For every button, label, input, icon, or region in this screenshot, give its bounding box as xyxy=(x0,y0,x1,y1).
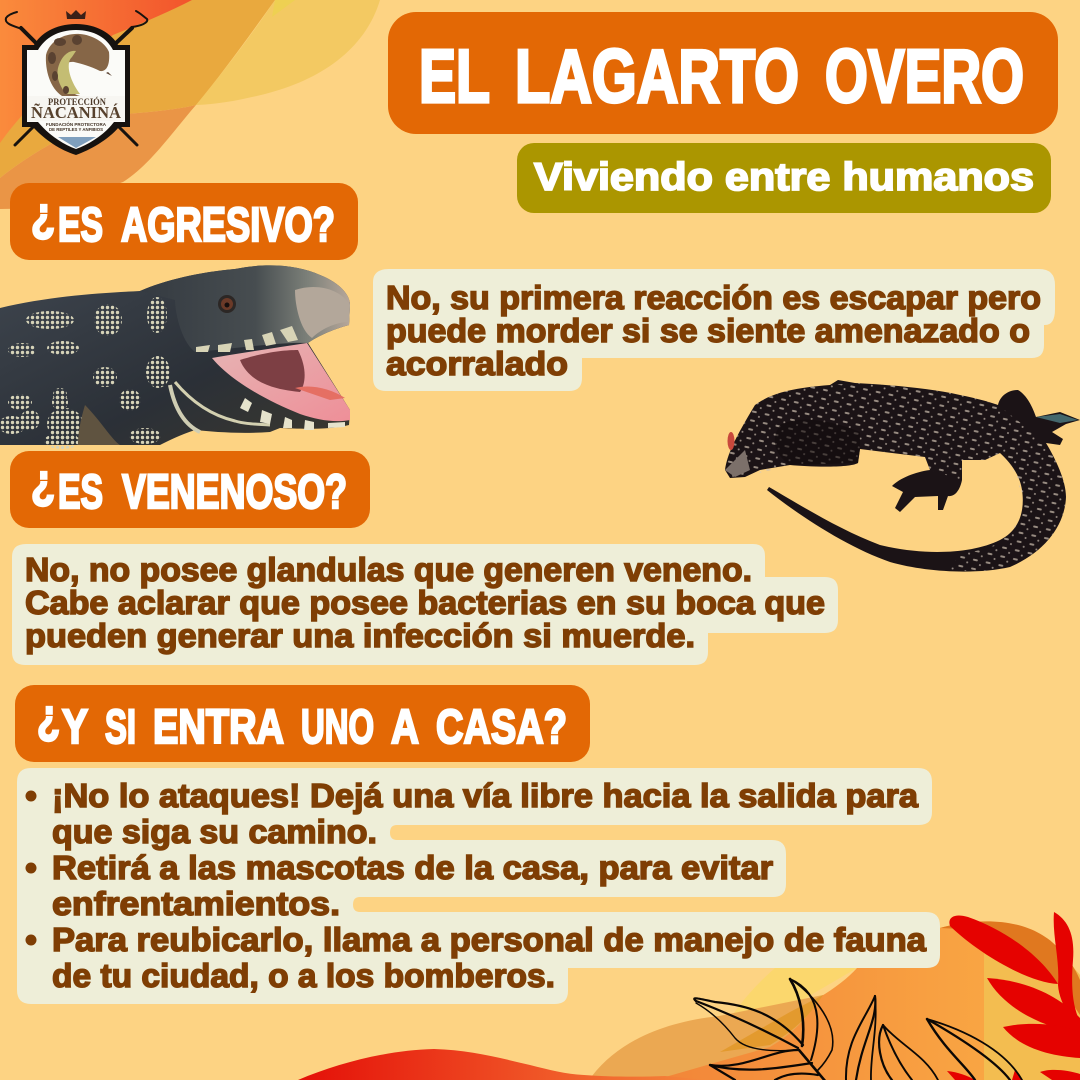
snout xyxy=(295,287,350,338)
heading: y si entra uno a casa: ENTRA xyxy=(153,701,284,754)
upper jaw stripes xyxy=(196,326,298,352)
photo: tegu lizard from above xyxy=(725,380,1080,572)
list text: ¡No lo ataques! Dejá una vía libre hacia la salida para xyxy=(52,777,919,814)
heading: es venenoso: VENENOSO? xyxy=(122,466,347,519)
heading: y si entra uno a casa: A xyxy=(391,701,419,754)
icon: snake head xyxy=(46,34,109,96)
title banner xyxy=(388,12,1058,134)
agresivo text: No, su primera reacción es escapar pero xyxy=(386,279,1041,316)
subtitle banner xyxy=(517,143,1051,213)
black outline leaves xyxy=(694,979,1022,1080)
agresivo text xyxy=(386,279,1041,382)
icon: snake markings xyxy=(48,35,112,94)
text box: list xyxy=(17,768,940,1004)
mouth xyxy=(212,343,350,421)
title text xyxy=(419,34,1024,118)
title text: LAGARTO xyxy=(515,34,799,118)
icon: snake belly xyxy=(57,51,80,94)
cream markings xyxy=(0,297,170,449)
list text: de tu ciudad, o a los bomberos. xyxy=(52,957,555,994)
bullets xyxy=(26,790,36,946)
heading: es venenoso xyxy=(10,451,370,528)
decorative corner shapes: top left xyxy=(0,0,380,209)
eye xyxy=(218,295,236,313)
decorative corner shapes: bottom xyxy=(298,921,1080,1080)
heading: y si entra uno a casa: SI xyxy=(105,701,136,754)
text box: venenoso xyxy=(12,544,838,665)
text box: agresivo xyxy=(373,269,1055,391)
logo text: fundación: FUNDACIÓN PROTECTORA xyxy=(46,122,106,127)
subtitle banner: Viviendo entre humanos xyxy=(534,156,1034,199)
logo: Protección Ñacaniná xyxy=(6,10,147,155)
lower jaw stripes xyxy=(175,382,270,425)
agresivo text: acorralado xyxy=(386,345,568,382)
icon: crown xyxy=(66,10,86,19)
list text: enfrentamientos. xyxy=(52,885,340,922)
venenoso text: pueden generar una infección si muerde. xyxy=(25,617,695,654)
logo text: protección: PROTECCIÓN xyxy=(48,96,106,108)
heading: es agresivo: ES xyxy=(58,199,103,252)
heading: y si entra uno a casa: UNO xyxy=(301,701,374,754)
icon: snake hooks xyxy=(6,11,147,145)
title text: EL xyxy=(419,34,490,118)
icon: shield xyxy=(22,24,130,155)
heading: y si entra uno a casa: CASA? xyxy=(436,701,567,754)
heading: es agresivo: ¿ xyxy=(31,189,55,242)
venenoso text xyxy=(25,551,825,654)
dark shadow on flank xyxy=(775,420,860,465)
list text xyxy=(52,777,927,994)
agresivo text: puede morder si se siente amenazado o xyxy=(386,312,1030,349)
venenoso text: No, no posee glandulas que generen veneno. xyxy=(25,551,752,588)
banner name xyxy=(27,96,125,121)
red leaves xyxy=(947,912,1080,1080)
heading: es agresivo xyxy=(10,183,358,260)
heading: y si entra uno a casa: Y xyxy=(62,701,88,754)
heading: es venenoso: ES xyxy=(58,466,103,519)
list text: Para reubicarlo, llama a personal de manejo de fauna xyxy=(52,921,927,958)
list text: que siga su camino. xyxy=(52,813,377,850)
heading: y si entra uno a casa xyxy=(15,685,590,762)
logo text: reptiles: DE REPTILES Y ANFIBIOS xyxy=(49,127,103,132)
heading: y si entra uno a casa: ¿ xyxy=(37,691,60,744)
heading: es agresivo: AGRESIVO? xyxy=(121,199,335,252)
shield interior xyxy=(27,30,125,149)
photo: open-mouthed tegu lizard xyxy=(0,265,350,449)
heading: es venenoso: ¿ xyxy=(31,456,55,509)
venenoso text: Cabe aclarar que posee bacterias en su boca que xyxy=(25,584,825,621)
red snout mark xyxy=(728,432,734,450)
logo text: ñacaniná: ÑACANINÁ xyxy=(31,103,122,122)
water band xyxy=(58,137,96,148)
list text: Retirá a las mascotas de la casa, para evitar xyxy=(52,849,773,886)
